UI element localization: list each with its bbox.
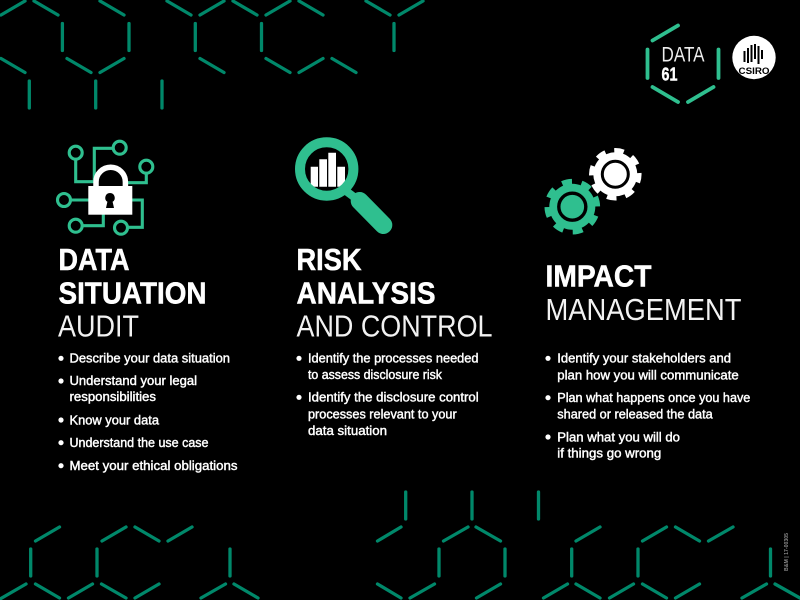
list: risk analysis steps: processes relevant to your	[308, 407, 457, 421]
list: audit steps: responsibilities	[70, 390, 156, 404]
heading: risk analysis and control: AND CONTROL	[296, 310, 492, 344]
logo: Data61 hexagon: 61	[662, 64, 678, 84]
heading: risk analysis and control: RISK	[296, 243, 362, 277]
job reference code: B&M | 17-00305	[784, 533, 790, 571]
list: risk analysis steps: to assess disclosure risk	[308, 368, 443, 382]
logo: CSIRO badge: CSIRO	[738, 66, 770, 77]
heading: risk analysis and control	[296, 243, 492, 344]
logo: CSIRO badge	[732, 36, 776, 79]
heading: data situation audit	[58, 243, 206, 344]
list: risk analysis steps: Identify the processes needed	[308, 352, 478, 366]
list: impact management steps: if things go wrong	[557, 447, 661, 461]
list: audit steps: Meet your ethical obligations	[70, 459, 238, 473]
list: risk analysis steps: data situation	[308, 424, 387, 438]
icon: padlock with circuit lines	[58, 141, 153, 234]
list: impact management steps	[545, 352, 750, 461]
heading: impact management: MANAGEMENT	[546, 293, 742, 327]
panel: risk analysis and control	[296, 142, 492, 438]
list: audit steps: Describe your data situation	[70, 352, 230, 366]
icon: gears	[540, 150, 640, 239]
heading: impact management	[546, 260, 742, 327]
list: impact management steps: shared or released the data	[557, 407, 713, 421]
heading: data situation audit: DATA	[58, 243, 130, 277]
list: audit steps	[58, 352, 238, 473]
list: impact management steps: Identify your stakeholders and	[557, 352, 731, 366]
list: impact management steps: Plan what happens once you have	[557, 391, 750, 405]
list: audit steps: Understand your legal	[70, 374, 197, 388]
logo: Data61 hexagon	[648, 26, 718, 102]
icon: white gear	[591, 150, 640, 199]
list: impact management steps: Plan what you will do	[557, 430, 680, 444]
heading: data situation audit: SITUATION	[58, 276, 206, 310]
logo: Data61 hexagon: DATA	[662, 43, 705, 66]
icon: green gear	[540, 174, 605, 239]
heading: risk analysis and control: ANALYSIS	[296, 276, 436, 310]
panel: data situation audit	[58, 141, 238, 473]
panel: impact management	[540, 150, 750, 461]
list: risk analysis steps: Identify the disclosure control	[308, 391, 479, 405]
heading: data situation audit: AUDIT	[58, 310, 139, 344]
icon: magnifying glass over bar chart	[300, 142, 383, 225]
list: audit steps: Know your data	[70, 413, 159, 427]
list: impact management steps: plan how you will communicate	[557, 368, 739, 382]
heading: impact management: IMPACT	[546, 260, 652, 294]
list: audit steps: Understand the use case	[70, 436, 208, 450]
list: risk analysis steps	[296, 352, 479, 438]
